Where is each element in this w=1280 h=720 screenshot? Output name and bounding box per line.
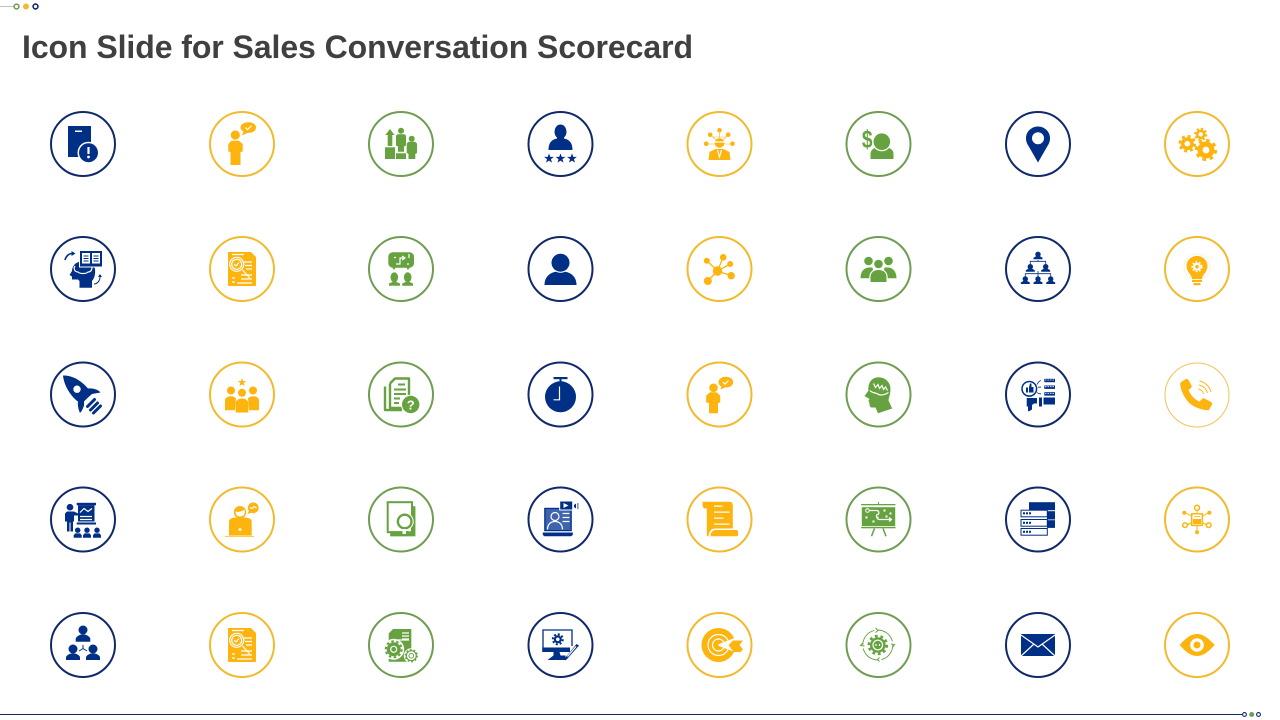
icon: strategy presentation board — [846, 488, 910, 552]
icon: portfolio with badge — [369, 488, 433, 552]
icon: document with question mark — [369, 362, 433, 426]
icon: envelope — [1006, 613, 1070, 677]
icon: strategy bubble between two people — [369, 237, 433, 301]
icon: phone with signal waves — [1165, 363, 1229, 427]
icon: light bulb with gear — [1165, 237, 1229, 301]
icon: server stack — [1006, 488, 1070, 552]
icon: molecule network — [688, 237, 752, 301]
icon: businessman with approval speech bubble (small) — [688, 362, 752, 426]
icon: video lesson on laptop — [528, 488, 592, 552]
icon: document with gears — [369, 613, 433, 677]
icon: gear with cycle arrows — [846, 613, 910, 677]
icon: businessman with idea nodes — [688, 112, 752, 176]
icon: document with magnifying glass — [210, 237, 274, 301]
icon: team hierarchy of three people — [51, 613, 115, 677]
icon: document with question mark: ? — [407, 397, 415, 412]
icon: document alert — [51, 112, 115, 176]
title: Icon Slide for Sales Conversation Scorecard — [22, 29, 693, 65]
icon: head with open book and cycle arrows — [51, 237, 115, 301]
icon: rocket — [51, 362, 115, 426]
icon: head with brain — [846, 362, 910, 426]
icon: data hub network — [1165, 488, 1229, 552]
icon: person with three-star rating — [528, 112, 592, 176]
bottom decoration: line and three dots — [0, 712, 1260, 717]
icon: stopwatch — [528, 362, 592, 426]
icon: person at laptop with speech bubble — [210, 488, 274, 552]
icon: person with dollar sign: $ — [862, 125, 873, 153]
icon: document with magnifying glass — [210, 613, 274, 677]
icon: people climbing boxes with up arrow — [369, 112, 433, 176]
icon: team with star — [210, 362, 274, 426]
icon: monitor with gear and pen — [528, 613, 592, 677]
icon: target with arrow — [688, 613, 752, 677]
icon: presenter with audience — [51, 488, 115, 552]
top decoration: line and three dots — [0, 4, 38, 10]
icon: businessman with approval speech bubble — [210, 112, 274, 176]
icon: person with dollar sign — [846, 112, 910, 176]
icon: group of three people — [846, 237, 910, 301]
icon: three gears — [1165, 112, 1229, 176]
icon: organisation hierarchy — [1006, 237, 1070, 301]
icon: location pin — [1006, 112, 1070, 176]
icon: hand with feedback thumbs up and rating — [1006, 362, 1070, 426]
icon: scroll document — [688, 488, 752, 552]
icon: eye — [1165, 613, 1229, 677]
icon: person — [528, 237, 592, 301]
